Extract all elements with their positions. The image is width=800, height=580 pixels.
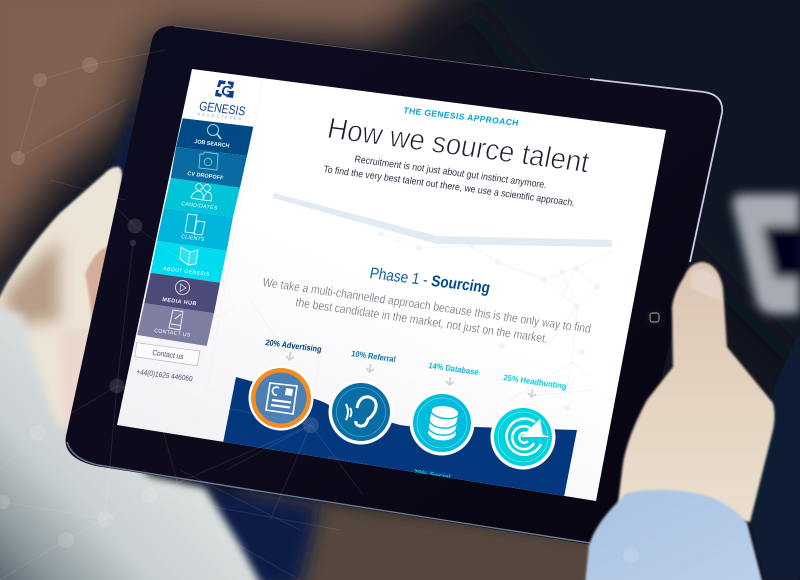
divider band [273,193,612,247]
icon: camera [199,152,218,170]
title: How we source talent [325,112,592,179]
icon: people [191,184,212,201]
icon: tablets [185,214,205,235]
channel labels: 10% Referral [351,348,397,364]
phase description: We take a multi-channelled approach because this is the only way to find [261,275,592,336]
intro text [322,154,576,209]
nav: cv dropoff [171,147,247,188]
contact button: Contact us [152,348,185,361]
network overlay [0,50,639,580]
icon: phone [169,310,183,330]
nav: job search: JOB SEARCH [194,139,230,150]
phase heading: Phase 1 - Sourcing [368,265,492,297]
nav: clients [157,208,233,251]
blurred device in background [733,194,800,314]
channel labels: 25% Headhunting [503,372,568,391]
icon: database circle [410,390,474,456]
icon: target circle [490,404,556,470]
sidebar navigation [137,118,253,346]
logo [197,80,247,122]
nav: about genesis: ABOUT GENESIS [163,266,210,278]
phone number: +44(0)1625 446060 [136,367,193,383]
tablet edge highlights [590,79,722,262]
channel labels: 20% Advertising [265,337,323,354]
icon: ear circle [328,380,394,444]
contact button [135,343,200,366]
down arrows [286,352,536,397]
nav: contact us [137,303,214,346]
icon: advertising circle [248,366,314,430]
nav: cv dropoff: CV DROPOFF [187,171,224,182]
blue wave panel [223,377,577,497]
phase description: the best candidate in the market, not just on the market. [294,295,549,346]
clipped lower labels: 8% Networking [327,455,368,469]
icon: magnifier [208,124,221,139]
nav: candidates: CANDIDATES [181,201,218,212]
nav: job search [176,118,253,156]
nav: contact us: CONTACT US [154,328,191,339]
logo wordmark: GENESIS [198,99,247,118]
logo subtitle: ASSOCIATES [197,111,244,122]
nav: clients: CLIENTS [181,234,205,243]
logo mark: G [220,83,234,100]
nav: media hub: MEDIA HUB [162,297,197,307]
intro text: To find the very best talent out there, we use a scientific approach. [322,164,576,209]
icon: play [176,280,190,294]
heading eyebrow: THE GENESIS APPROACH [403,105,521,128]
icon: book [180,247,198,265]
left hand [0,167,122,450]
home button [644,307,666,329]
right sleeve [585,490,763,580]
tablet body [66,26,722,548]
clipped lower labels: 20% Social [413,468,451,482]
intro text: Recruitment is not just about gut instinct anymore. [353,154,548,191]
tablet [66,26,722,548]
screen network pattern [121,78,612,410]
channel labels: 14% Database [428,360,480,377]
channel labels [265,337,568,391]
clipped lower labels [328,456,450,478]
left sleeve [0,306,265,580]
nav: media hub [144,273,220,313]
nav: candidates [164,178,240,217]
nav: about genesis [151,241,227,283]
right hand [618,262,774,522]
screen [117,69,666,501]
